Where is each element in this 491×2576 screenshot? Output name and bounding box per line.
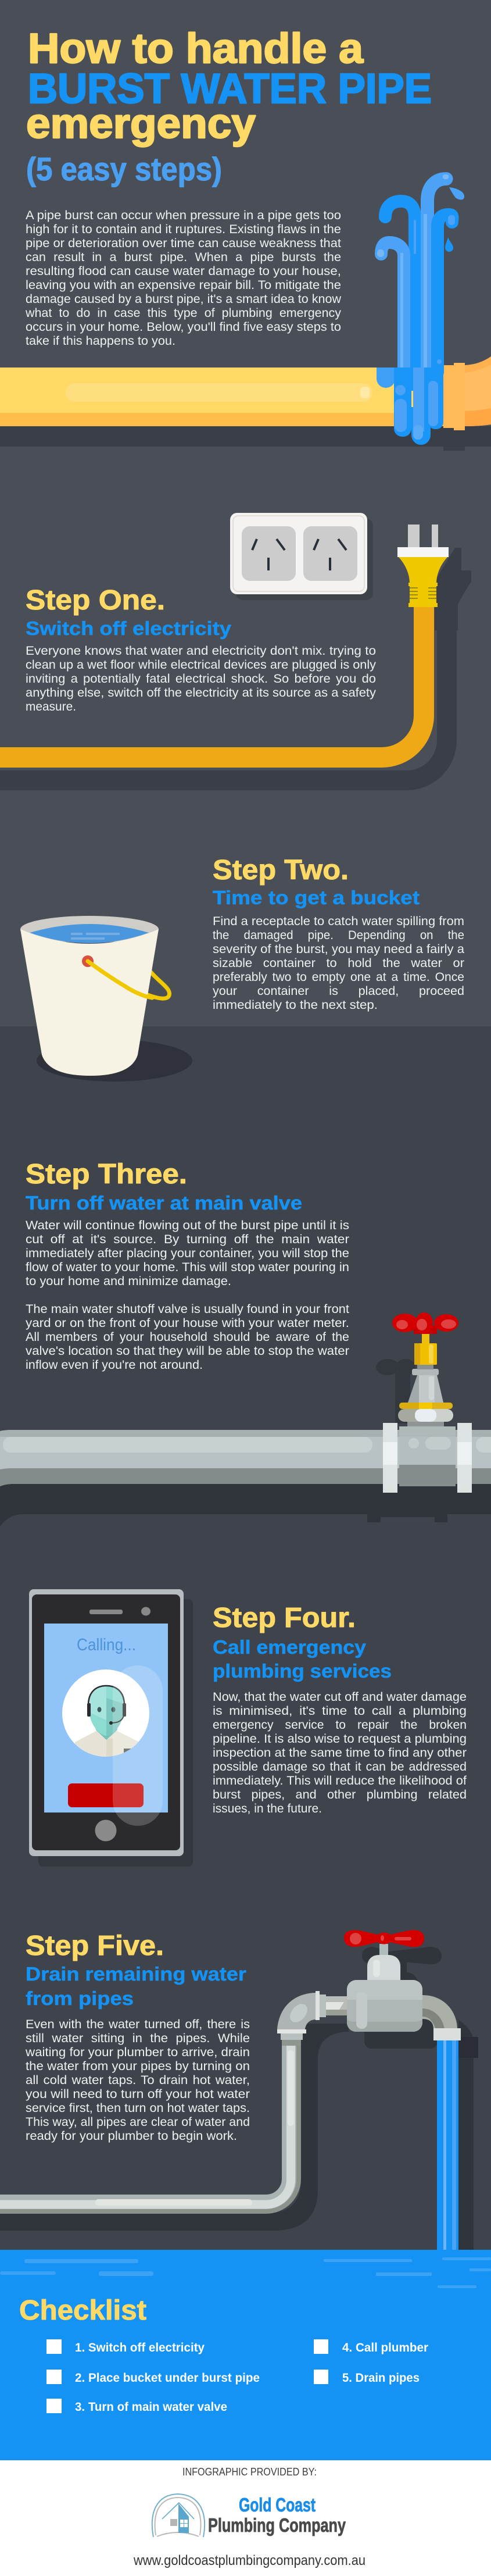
intro text: can result in a burst pipe. When a pipe bursts the (26, 251, 341, 264)
heading: step three (26, 1159, 302, 1214)
text: step three: The main water shutoff valve is usually found in your front (26, 1303, 349, 1316)
item 2: 2. Place bucket under burst pipe (75, 2371, 260, 2385)
text: step one: Everyone knows that water and electricity don't mix. trying to (26, 644, 376, 658)
logo: Plumbing Company (208, 2514, 346, 2536)
text: step two: preferably two to empty one at a time. Once (213, 971, 464, 984)
text: step five: ready for your plumber to begin work. (26, 2129, 237, 2143)
heading: step five: Drain remaining water (26, 1963, 246, 1985)
intro text: damage caused by a burst pipe, it's a smart idea to know (26, 292, 342, 306)
text: step five: Even with the water turned off, there is (26, 2018, 250, 2031)
grey water main pipe (0, 1430, 491, 1526)
text: step five: the water from your pipes by turning on (26, 2060, 250, 2073)
heading: step five (26, 1931, 246, 2009)
text: step four: pipeline. It is also wise to request a plumbing (213, 1732, 467, 1746)
item 5 (314, 2370, 420, 2385)
title: How to handle a (28, 26, 364, 72)
title: emergency (26, 101, 256, 147)
right outlet elbow (422, 1995, 461, 2040)
text: step four: immediately. This will reduce the likelihood of (213, 1774, 467, 1787)
intro text: high for it to contain and it ruptures. Existing flaws in the (26, 223, 341, 236)
text: step one: inviting a potentially fatal electrical shock. So before you do (26, 672, 376, 686)
text: step one: clean up a wet floor while electrical devices are plugged is only (26, 658, 377, 672)
icon: power socket (230, 513, 373, 600)
heading: step one (26, 585, 232, 639)
heading: step five: from pipes (26, 1988, 134, 2009)
burst yellow pipe (0, 356, 491, 451)
text: step three: cut off at it's source. By turning off the main water (26, 1233, 349, 1246)
intro text (25, 209, 342, 348)
heading: step three: Turn off water at main valve (26, 1192, 302, 1214)
heading: step three: Step Three. (26, 1159, 187, 1190)
text: step three: inflow even if you're not around. (26, 1358, 203, 1372)
text: step two: Find a receptacle to catch water spilling from (213, 915, 464, 928)
intro text: pipe or deterioration over time can cause weakness that (26, 237, 341, 250)
icon: bucket (20, 916, 192, 1082)
text: step three: All members of your household should be aware of the (26, 1330, 349, 1344)
intro text: what to do in case this type of plumbing emergency (25, 306, 342, 320)
title: BURST WATER PIPE (28, 66, 432, 112)
tap and pipe shadow (0, 1947, 478, 2250)
item 5: 5. Drain pipes (342, 2371, 420, 2385)
text: step three: valve's location so that they will be able to stop the water (26, 1344, 349, 1358)
panel: checklist (0, 2250, 491, 2460)
item 4 (314, 2339, 428, 2354)
text: step three: immediately after placing your container, you will stop the (26, 1247, 349, 1260)
icon: tap (344, 1930, 424, 2032)
heading: step one: Step One. (26, 585, 165, 616)
text: step two: severity of the burst, you may need a fairly a (213, 943, 464, 956)
icon: phone calling plumber (29, 1589, 193, 1867)
text: step four (213, 1690, 467, 1815)
icon: power plug (397, 525, 449, 607)
text: step two: the damaged pipe. Depending on the (213, 929, 464, 942)
item 3: 3. Turn of main water valve (75, 2400, 227, 2414)
text: calling: Calling... (77, 1636, 136, 1654)
title: (5 easy steps) (26, 151, 222, 187)
blue water stream (437, 2040, 458, 2250)
heading: step four: Step Four. (213, 1603, 356, 1633)
provided by: INFOGRAPHIC PROVIDED BY: (182, 2466, 317, 2478)
intro text: resulting flood can cause water damage to your house, (26, 265, 341, 278)
text: step two: immediately to the next step. (213, 998, 378, 1012)
item 4: 4. Call plumber (342, 2341, 428, 2354)
avatar (62, 1669, 149, 1762)
website url: www.goldcoastplumbingcompany.com.au (133, 2553, 365, 2568)
text: step five: all cold water taps. To drain hot water, (26, 2074, 250, 2087)
text: step four: emergency service to repair the broken (213, 1718, 467, 1732)
text: step four: burst pipes, and other plumbing related (213, 1788, 467, 1801)
text: step four: is minimised, it's time to call a plumbing (213, 1704, 467, 1718)
text: step four: Now, that the water cut off and water damage (213, 1690, 467, 1704)
logo: Gold Coast (239, 2494, 316, 2516)
item 1: 1. Switch off electricity (75, 2341, 205, 2354)
heading: step two (213, 855, 420, 908)
text: step five: you will need to turn off your hot water (26, 2088, 250, 2101)
text: step two (213, 915, 464, 1012)
text: step five: waiting for your plumber to arrive, drain (25, 2046, 250, 2059)
water burst jets (377, 174, 464, 445)
yellow power cord (0, 605, 424, 757)
yellow power cord shadow (0, 548, 471, 780)
heading: step four (213, 1603, 392, 1682)
icon: main water valve (376, 1312, 472, 1493)
heading: step five: Step Five. (26, 1931, 164, 1961)
title (26, 26, 432, 187)
logo (152, 2494, 346, 2537)
heading: step two: Step Two. (213, 855, 349, 886)
text: step one (26, 644, 377, 713)
text: step two: sizable container to hold the water or (213, 957, 464, 970)
intro text: take if this happens to you. (26, 334, 175, 348)
intro text: leaving you with an expensive repair bill. To mitigate the (26, 279, 341, 292)
text: step four: inspection at the same time to find any other (213, 1746, 467, 1760)
text: step five: still water sitting in the pipes. While (26, 2032, 250, 2045)
text: step one: anything else, switch off the electricity at its source as a safety (26, 686, 377, 700)
intro text: occurs in your home. Below, you'll find five easy steps to (26, 320, 341, 334)
heading: step two: Time to get a bucket (213, 887, 420, 908)
heading: step four: plumbing services (213, 1660, 392, 1682)
heading: step one: Switch off electricity (26, 618, 232, 639)
heading: step four: Call emergency (213, 1636, 367, 1658)
text: step five: This way, all pipes are clear of water and (26, 2115, 250, 2129)
text: step five: service first, then turn on hot water taps. (26, 2102, 250, 2115)
text: step three: to your home and minimize damage. (26, 1275, 231, 1288)
text: step one: measure. (26, 700, 76, 713)
intro text: A pipe burst can occur when pressure in a pipe gets too (26, 209, 341, 222)
text: step two: your container is placed, proceed (213, 984, 464, 998)
text: step three: yard or on the front of your house with your water meter. (26, 1316, 349, 1330)
left supply pipe (0, 1991, 347, 2206)
checklist heading: Checklist (19, 2295, 146, 2326)
text: step three (26, 1219, 349, 1372)
text: step three: flow of water to your home. This will stop water pouring in (26, 1261, 349, 1274)
text: step five (25, 2018, 250, 2143)
panel: footer (0, 2460, 491, 2576)
text: step four: issues, in the future. (213, 1802, 322, 1815)
text: step three: Water will continue flowing out of the burst pipe until it is (26, 1219, 349, 1232)
text: step four: possible damage so that it can be addressed (213, 1760, 467, 1774)
